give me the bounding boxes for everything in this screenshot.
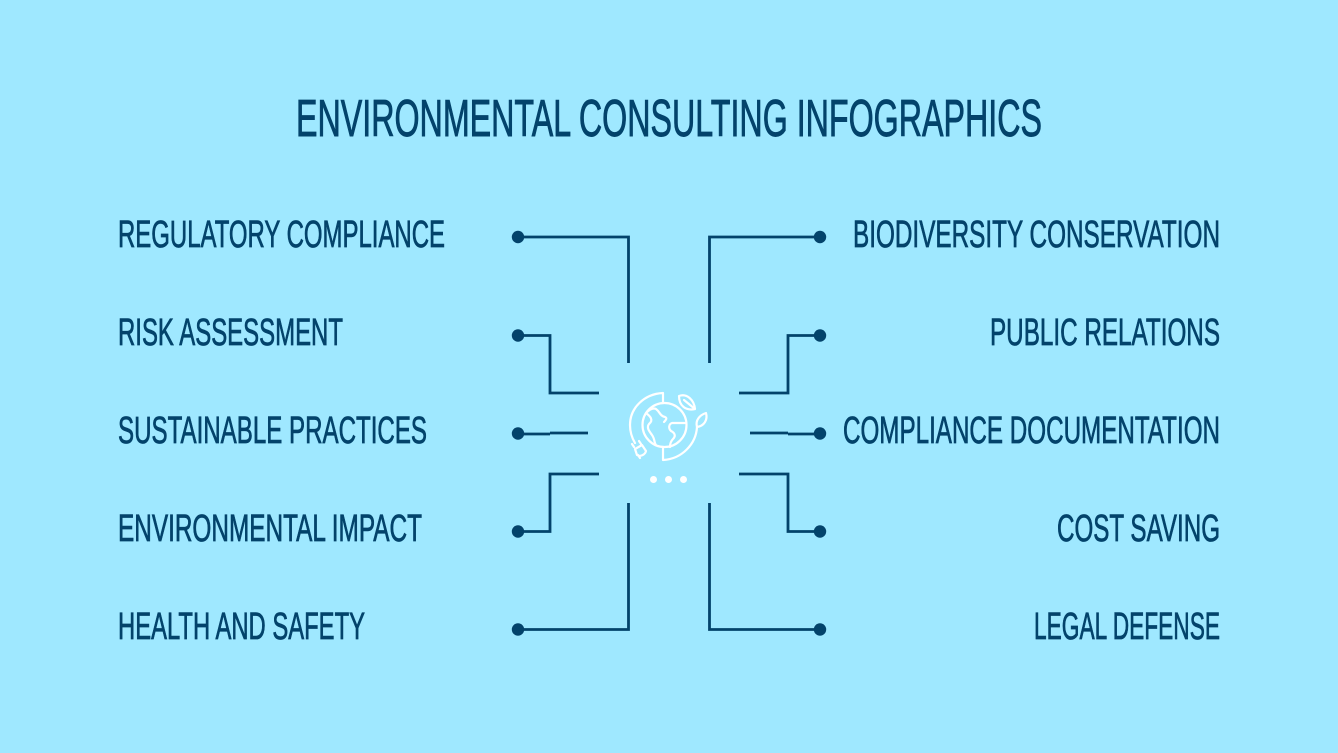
right power band: [663, 427, 697, 460]
globe outline: [642, 403, 686, 447]
connector: legal defense: [710, 503, 826, 636]
pagination dots: [650, 476, 687, 483]
plug: [632, 441, 646, 458]
connectors: right side: [710, 231, 826, 636]
label: risk assessment: RISK ASSESSMENT: [118, 312, 343, 354]
connector: biodiversity conservation: [710, 231, 826, 363]
left column labels: [118, 214, 445, 648]
connector: sustainable practices: [512, 427, 588, 440]
big leaf: [679, 395, 695, 409]
label: health and safety: HEALTH AND SAFETY: [118, 606, 365, 648]
label: cost saving: COST SAVING: [1057, 508, 1220, 550]
small leaf: [697, 413, 707, 427]
connector: compliance documentation: [750, 427, 826, 440]
continents: [646, 408, 666, 445]
connector: risk assessment: [512, 329, 599, 393]
right column labels: [843, 214, 1220, 648]
label: legal defense: LEGAL DEFENSE: [1034, 606, 1220, 648]
connector: environmental impact: [512, 474, 599, 538]
connector: cost saving: [739, 474, 826, 538]
connector: public relations: [739, 329, 826, 393]
label: environmental impact: ENVIRONMENTAL IMPACT: [118, 508, 422, 550]
label: sustainable practices: SUSTAINABLE PRACTICES: [118, 410, 427, 452]
connectors: left side: [512, 231, 628, 636]
left power band: [630, 393, 663, 443]
connector: regulatory compliance: [512, 231, 628, 363]
icon: globe with plug and leaves: [630, 393, 707, 460]
connector: health and safety: [512, 503, 628, 636]
label: regulatory compliance: REGULATORY COMPLIANCE: [118, 214, 445, 256]
